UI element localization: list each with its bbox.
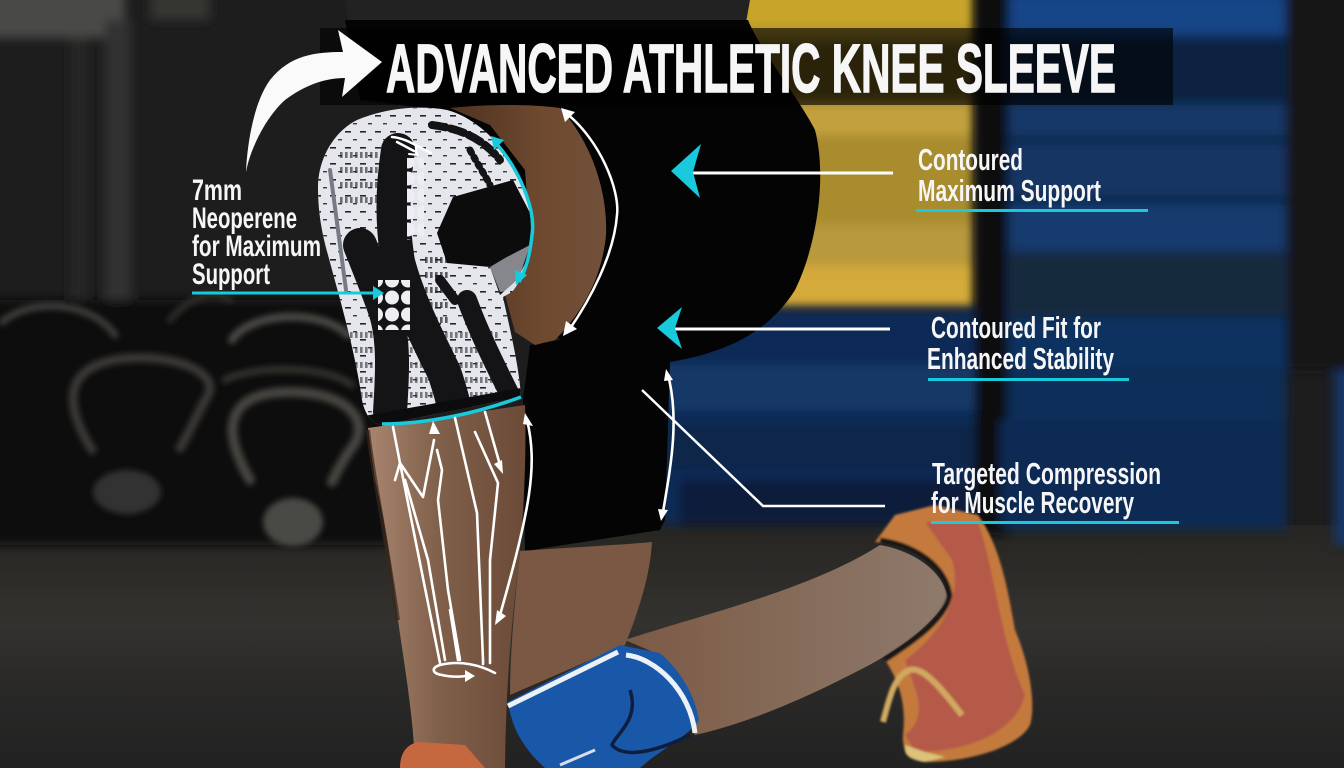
orange sock [400, 742, 485, 768]
white thigh double arrow [561, 108, 617, 336]
sleeve print [330, 125, 510, 422]
callout: contoured fit: Enhanced Stability [927, 341, 1115, 376]
left label: 7mm neoprene: Support [192, 258, 270, 291]
leader line [642, 390, 885, 506]
upper thigh skin [450, 105, 606, 345]
shin skin [368, 405, 525, 768]
rear calf skin [625, 545, 948, 735]
blue knee pad [508, 645, 699, 768]
callout: contoured fit: Contoured Fit for [931, 310, 1101, 345]
horizontal print rows [340, 152, 378, 203]
curved arrow to title [246, 30, 382, 172]
calf muscle lines [393, 369, 674, 682]
rear thigh skin [510, 542, 652, 695]
orange shoe [875, 505, 1032, 762]
callout: contoured fit [657, 307, 1129, 381]
black side panel [437, 180, 540, 295]
left label: 7mm neoprene: 7mm [192, 174, 242, 207]
sleeve hem [368, 388, 521, 425]
blue weight plates [660, 0, 1344, 545]
callout: targeted compression [642, 390, 1179, 524]
callout: contoured maximum support [671, 142, 1148, 212]
callout: targeted compression: Targeted Compression [932, 456, 1161, 491]
yellow weight plates [735, 0, 975, 307]
left label: 7mm neoprene [192, 174, 321, 291]
shorts [345, 20, 820, 551]
shirt [345, 0, 750, 28]
cyan double arc arrow on sleeve [491, 136, 533, 285]
small sleeve arrow [392, 137, 431, 155]
leader arrow [671, 144, 893, 198]
figure: athlete [345, 0, 1032, 768]
callout: targeted compression: for Muscle Recovery [931, 485, 1135, 520]
knee sleeve [318, 108, 531, 425]
kettlebells [2, 295, 359, 546]
cyan hem line [382, 397, 521, 424]
left label: 7mm neoprene: for Maximum [192, 230, 321, 263]
callout: contoured maximum support: Maximum Support [918, 173, 1101, 208]
title bar [320, 28, 1173, 107]
callout: contoured maximum support: Contoured [918, 142, 1023, 177]
leader arrow [657, 307, 890, 349]
hairy shin edge [368, 430, 398, 620]
left label: 7mm neoprene: Neoperene [192, 202, 297, 235]
cyan arrow to sleeve [192, 286, 384, 300]
